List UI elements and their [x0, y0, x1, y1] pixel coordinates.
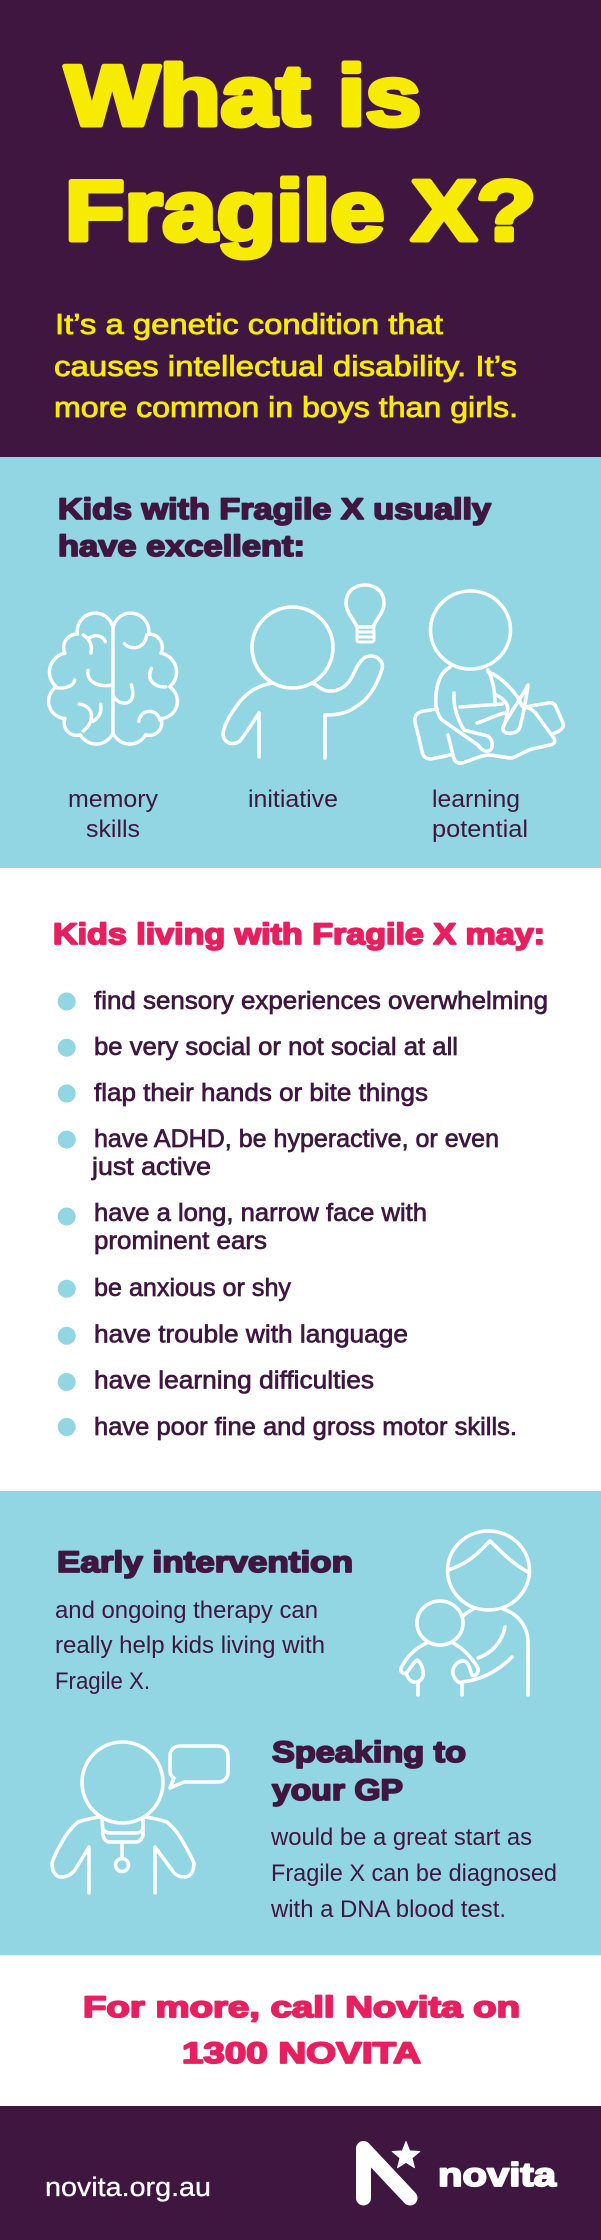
GP text: [270, 1824, 557, 1923]
label: learning potential: [432, 786, 528, 843]
panel: footer: [0, 2106, 601, 2240]
title: What is: [65, 49, 421, 144]
list items: prominent ears: [94, 1227, 267, 1255]
list items: [91, 987, 548, 1441]
strengths heading: [58, 493, 491, 563]
list items: have trouble with language: [94, 1320, 408, 1348]
icon: doctor with speech bubble: [52, 1742, 228, 1893]
list items: have ADHD, be hyperactive, or even: [94, 1125, 499, 1153]
panel: help: [0, 1491, 601, 1955]
early intervention text: really help kids living with: [55, 1632, 325, 1659]
icon: brain: [49, 613, 177, 744]
label: learning potential: learning: [432, 786, 520, 813]
early intervention heading: Early intervention: [57, 1546, 353, 1579]
list items: just active: [91, 1153, 211, 1181]
label: memory skills: memory: [68, 786, 158, 813]
call to action: [83, 1991, 520, 2070]
GP heading: your GP: [272, 1774, 403, 1807]
GP text: with a DNA blood test.: [270, 1896, 506, 1923]
list items: find sensory experiences overwhelming: [94, 987, 548, 1015]
panel: strengths: [0, 457, 601, 868]
title: Fragile X?: [65, 164, 536, 259]
early intervention text: [55, 1597, 325, 1695]
GP text: would be a great start as: [270, 1824, 532, 1851]
list items: be anxious or shy: [94, 1274, 291, 1302]
GP heading: [272, 1736, 466, 1807]
list items: be very social or not social at all: [94, 1033, 458, 1061]
intro text: more common in boys than girls.: [54, 392, 518, 424]
call to action: 1300 NOVITA: [182, 2037, 421, 2070]
label: initiative: initiative: [248, 786, 338, 813]
call to action: For more, call Novita on: [83, 1991, 520, 2024]
icon: child with light bulb: [223, 585, 384, 758]
website: novita.org.au: [45, 2172, 211, 2202]
GP text: Fragile X can be diagnosed: [271, 1860, 557, 1887]
title: [65, 49, 536, 259]
list items: have a long, narrow face with: [94, 1199, 427, 1227]
list heading: Kids living with Fragile X may:: [53, 918, 545, 951]
intro text: [54, 309, 518, 424]
GP heading: Speaking to: [272, 1736, 466, 1769]
list items: have poor fine and gross motor skills.: [94, 1413, 517, 1441]
logo: novita: [364, 2142, 557, 2198]
list items: have learning difficulties: [94, 1366, 374, 1394]
strengths heading: Kids with Fragile X usually: [58, 493, 491, 526]
icon: parent holding child: [401, 1531, 530, 1695]
intro text: It’s a genetic condition that: [55, 309, 443, 341]
panel: header: [0, 0, 601, 457]
list items: flap their hands or bite things: [94, 1079, 428, 1107]
early intervention text: and ongoing therapy can: [55, 1597, 318, 1624]
early intervention text: Fragile X.: [55, 1668, 150, 1695]
label: learning potential: potential: [432, 816, 528, 843]
strengths heading: have excellent:: [58, 530, 305, 563]
icon: child drawing: [415, 591, 563, 763]
label: memory skills: [68, 786, 158, 843]
logo: novita: novita: [438, 2156, 557, 2193]
panel: symptoms list: [53, 918, 548, 1441]
label: memory skills: skills: [86, 816, 140, 843]
intro text: causes intellectual disability. It’s: [54, 351, 517, 383]
bullet points: [58, 992, 76, 1436]
